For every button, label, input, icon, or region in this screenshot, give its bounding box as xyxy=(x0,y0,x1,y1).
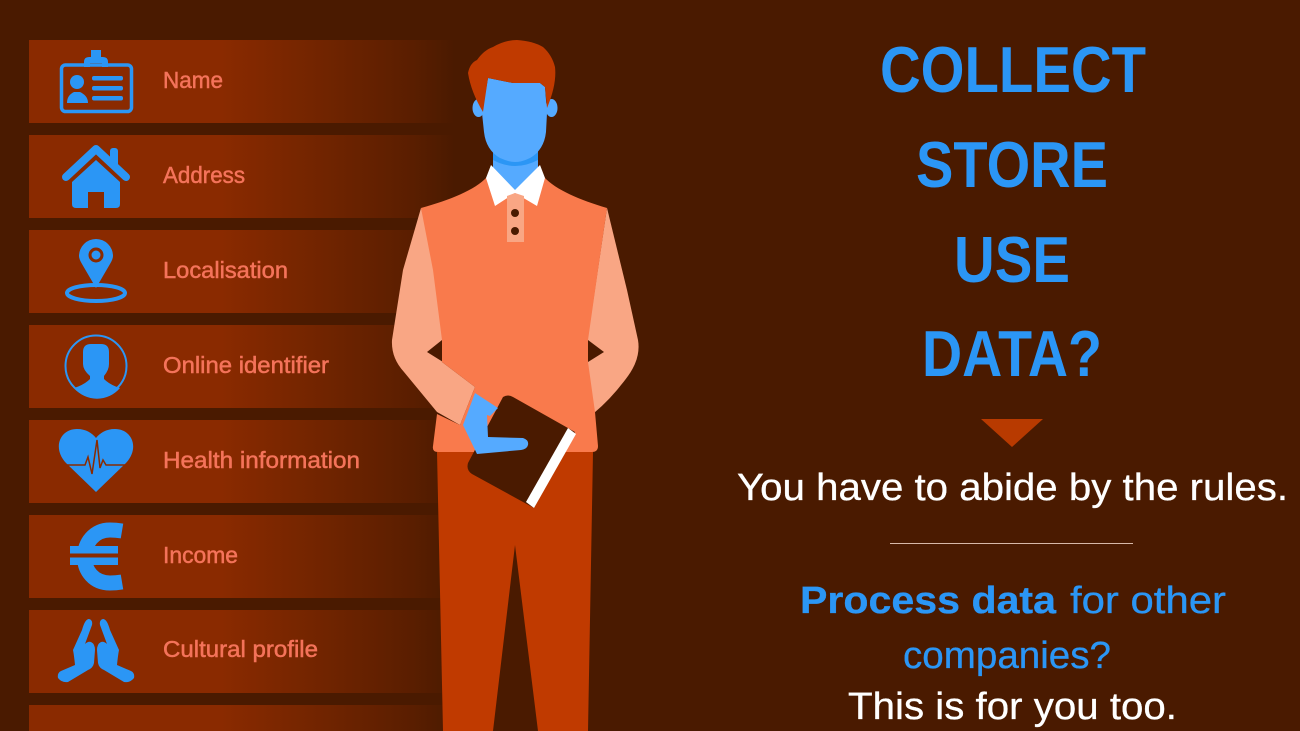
label: cultural profile: Cultural profile xyxy=(163,636,318,662)
neck xyxy=(493,150,538,192)
label: income: Income xyxy=(163,542,238,568)
row: cut-off eighth row xyxy=(29,705,455,731)
row: health information xyxy=(29,420,455,503)
text: process data for other companies: companies? xyxy=(903,635,1111,677)
heading: collect store use data xyxy=(880,33,1146,390)
vest xyxy=(421,177,607,452)
right arm xyxy=(586,208,639,413)
text: process data for other companies: for other xyxy=(1070,580,1226,622)
gap triangles between arms and vest xyxy=(427,340,604,362)
figure: man holding a book xyxy=(392,40,639,731)
label: localisation: Localisation xyxy=(163,257,288,283)
label: online identifier: Online identifier xyxy=(163,352,329,378)
ears xyxy=(472,99,484,117)
panel: personal data list xyxy=(29,40,455,731)
hand xyxy=(463,393,528,454)
face xyxy=(482,78,547,162)
left arm xyxy=(392,208,475,425)
icon: id badge xyxy=(62,50,132,112)
icon: praying hands xyxy=(58,619,134,682)
neck shadow xyxy=(493,152,538,166)
arrow: down triangle xyxy=(981,419,1043,447)
row: localisation xyxy=(29,230,455,313)
label: health information: Health information xyxy=(163,447,360,473)
text: abide by the rules: You have to abide by the rules. xyxy=(737,467,1288,509)
row: cultural profile xyxy=(29,610,455,693)
icon: heart with pulse xyxy=(59,429,133,492)
row: name xyxy=(29,40,455,123)
icon: map pin xyxy=(67,239,125,301)
text: process data for other companies xyxy=(800,580,1226,728)
icon: euro xyxy=(70,530,122,583)
placket and buttons xyxy=(507,193,524,242)
icon: user in circle xyxy=(66,336,126,399)
text: process data for other companies: Process data xyxy=(800,580,1057,622)
label: address: Address xyxy=(163,162,245,188)
hair xyxy=(468,40,555,112)
row: income xyxy=(29,515,455,598)
trousers xyxy=(437,452,593,731)
heading: collect store use data: COLLECT xyxy=(880,33,1146,106)
book xyxy=(468,396,576,508)
row: online identifier xyxy=(29,325,455,408)
heading: collect store use data: STORE xyxy=(916,128,1108,201)
text: process data for other companies: This is for you too. xyxy=(848,686,1177,728)
collar xyxy=(486,165,545,206)
icon: house xyxy=(66,148,126,208)
heading: collect store use data: DATA? xyxy=(922,317,1102,390)
row: address xyxy=(29,135,455,218)
heading: collect store use data: USE xyxy=(954,223,1070,296)
label: name: Name xyxy=(163,67,223,93)
